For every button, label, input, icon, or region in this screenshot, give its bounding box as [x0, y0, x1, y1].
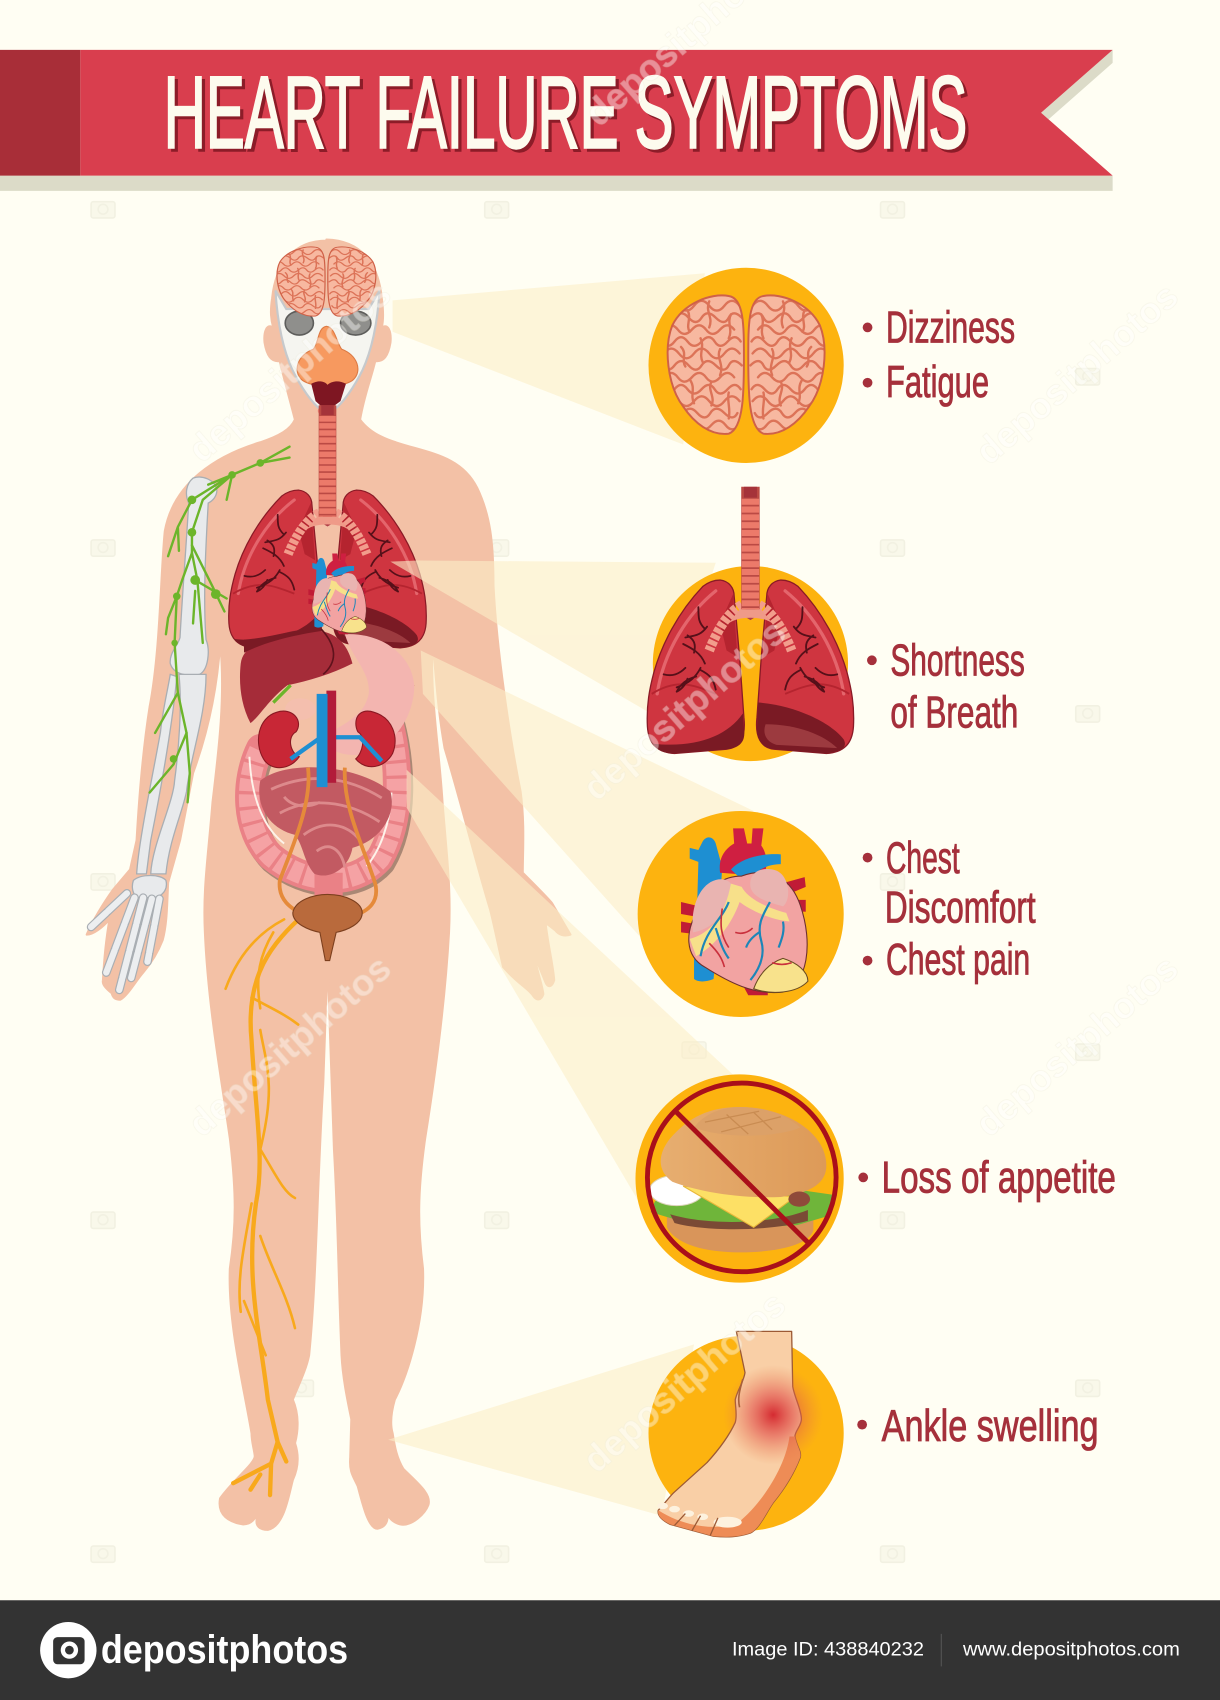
eye sockets	[285, 311, 313, 335]
watermarks: depositphotos	[180, 947, 399, 1144]
icon: swollen foot	[657, 1331, 823, 1537]
lungs panel	[647, 487, 1025, 761]
label: shortness of breath	[867, 636, 1025, 737]
image id: Image ID: 438840232	[732, 1639, 924, 1661]
spleen	[380, 685, 414, 707]
circle: heart	[638, 811, 844, 1017]
icon: heart	[681, 828, 808, 995]
heart panel	[638, 811, 1036, 1017]
lymphatic vessels	[150, 447, 290, 802]
beam: brain	[393, 273, 705, 445]
ankle panel	[648, 1331, 1099, 1537]
body silhouette	[87, 240, 570, 1530]
bladder	[293, 894, 362, 961]
brain panel	[648, 268, 1015, 463]
footer background	[0, 1600, 1220, 1700]
icon: lungs	[647, 487, 854, 754]
head anatomy	[273, 247, 380, 414]
label: loss of appetite	[858, 1154, 1116, 1203]
label: chest symptoms: Chest	[886, 834, 960, 883]
label: dizziness fatigue: Fatigue	[886, 358, 989, 407]
beam: ankle	[388, 1344, 694, 1516]
human body figure	[87, 240, 570, 1530]
finger bones	[91, 893, 159, 990]
label: chest symptoms: Chest pain	[886, 936, 1030, 985]
watermarks: depositphotos	[967, 275, 1186, 472]
website: www.depositphotos.com	[962, 1639, 1180, 1661]
title banner	[0, 50, 1113, 191]
skeleton arm	[91, 477, 217, 990]
skull	[275, 291, 380, 410]
icon: burger	[647, 1083, 836, 1272]
small lungs	[229, 405, 426, 648]
light beams from organs to circles	[388, 273, 754, 1516]
renal vessels	[291, 737, 382, 761]
watermarks: depositphotos	[575, 1283, 793, 1481]
small heart	[308, 553, 366, 634]
pancreas	[285, 698, 316, 720]
icon: brain	[662, 295, 831, 434]
larynx	[311, 381, 346, 410]
icon: camera logo	[40, 1622, 97, 1678]
watermarks: depositphotos	[575, 611, 793, 808]
forearm bone inner	[151, 674, 206, 874]
small brain	[273, 247, 380, 316]
label: ankle swelling: Ankle swelling	[882, 1402, 1099, 1451]
wrist bones	[132, 875, 166, 898]
right kidney	[356, 711, 395, 767]
label: dizziness fatigue	[863, 304, 1015, 407]
watermarks: depositphotos	[180, 273, 399, 470]
circle: brain	[648, 268, 844, 463]
circle: lungs	[653, 566, 848, 761]
label: chest symptoms: Discomfort	[885, 884, 1036, 933]
large intestine	[249, 719, 399, 882]
banner ribbon	[80, 50, 1113, 176]
vena cava	[317, 694, 328, 787]
neck ring	[318, 408, 336, 414]
label: shortness of breath: of Breath	[890, 688, 1018, 737]
beam: lungs	[390, 561, 716, 721]
watermarks	[180, 0, 1186, 1481]
small intestine	[259, 767, 392, 876]
watermarks: depositphotos	[967, 947, 1186, 1144]
upper arm bone	[170, 477, 217, 675]
banner shadow	[0, 50, 1113, 191]
sciatic nerve	[226, 913, 306, 1495]
colon stem	[314, 873, 343, 898]
appetite panel	[635, 1074, 1116, 1283]
label: chest symptoms	[863, 834, 1036, 985]
beam: stomach	[407, 770, 737, 1203]
liver	[240, 630, 352, 723]
footer bar	[0, 1600, 1220, 1700]
label: shortness of breath: Shortness	[890, 636, 1025, 685]
camera watermark icons	[91, 202, 1100, 1562]
label: loss of appetite: Loss of appetite	[882, 1154, 1116, 1203]
stomach	[321, 634, 414, 755]
left kidney	[258, 711, 299, 768]
nasal cavity	[297, 326, 358, 386]
beam: chest	[421, 651, 754, 949]
gallbladder	[273, 685, 291, 703]
circle: burger	[635, 1074, 844, 1283]
appendix line	[249, 757, 391, 866]
label: dizziness fatigue: Dizziness	[886, 304, 1015, 353]
liver lobe line	[321, 629, 334, 674]
forearm bone outer	[137, 674, 177, 874]
ureters	[280, 768, 376, 916]
intestine folds	[271, 779, 382, 867]
logo wordmark: depositphotos	[101, 1628, 348, 1672]
banner dark end	[0, 50, 80, 176]
aorta	[326, 691, 336, 783]
circle: ankle	[648, 1336, 844, 1531]
lung-liver dark band	[244, 627, 321, 653]
